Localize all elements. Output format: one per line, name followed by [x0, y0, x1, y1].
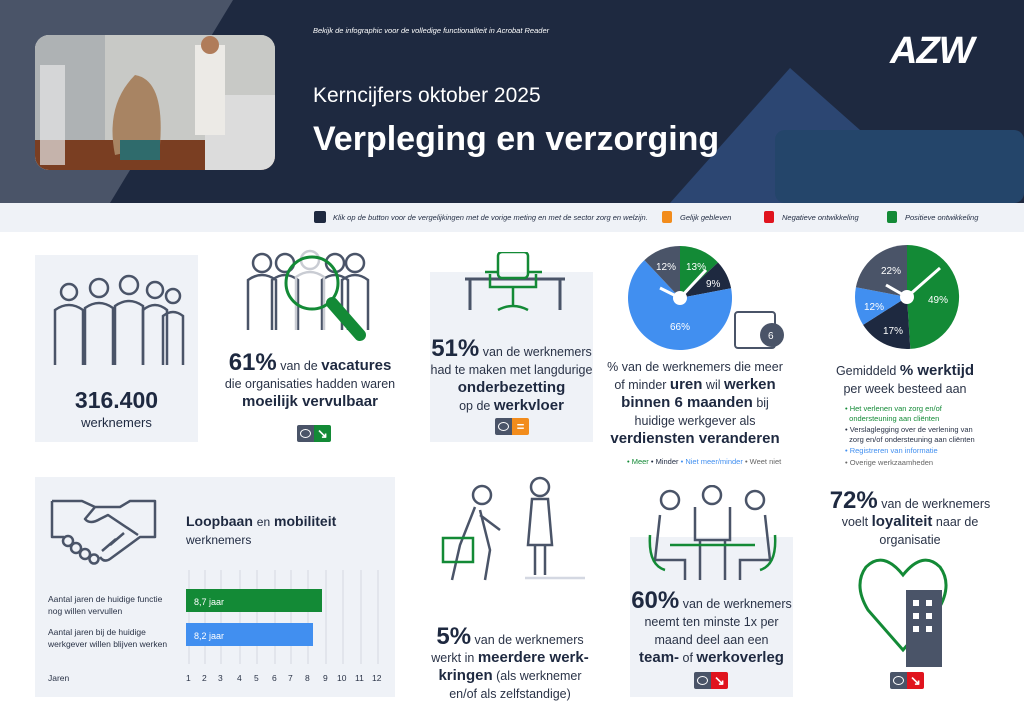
- bar chart: 11: [355, 673, 364, 683]
- bar chart: 8,2 jaar: [194, 631, 224, 641]
- legend bar: [0, 203, 1024, 232]
- bar chart: 8: [305, 673, 310, 683]
- panel: werkoverleg: [630, 537, 793, 697]
- text: 72%: voelt loyaliteit naar de: [842, 513, 978, 530]
- button 72: [890, 672, 924, 689]
- chart: pie uren: 6: [768, 331, 774, 342]
- legend werktijd: • Overige werkzaamheden: [845, 458, 933, 466]
- photo: [35, 35, 275, 170]
- text: uren: of minder uren wil werken: [614, 376, 776, 393]
- text: 51%: op de werkvloer: [459, 397, 564, 414]
- legend werktijd: • Het verlenen van zorg en/of: [845, 404, 942, 413]
- panel: werknemers: [35, 255, 198, 442]
- text: 61%: 61% van de vacatures: [229, 349, 391, 376]
- icon: handshake: [50, 500, 156, 565]
- button 61: ↘: [317, 426, 328, 441]
- chart: pie werktijd: 49%: [928, 295, 948, 306]
- icon: calendar: [735, 312, 775, 348]
- button 51: =: [517, 419, 524, 434]
- icon: meeting: [648, 485, 776, 580]
- button 60: ↘: [714, 673, 725, 688]
- chart: pie uren: 9%: [706, 279, 721, 290]
- icon: desk chair: [465, 252, 565, 312]
- chart: pie uren: 13%: [686, 262, 706, 273]
- text: 5%: [431, 623, 589, 701]
- legend bar: Klik op de button voor de vergelijkingen met de vorige meting en met de sector zorg en welzijn.: [333, 213, 648, 222]
- button 61: [297, 425, 331, 442]
- bar chart: 10: [337, 673, 347, 683]
- legend werktijd: • Verslaglegging over de verlening van: [845, 425, 973, 434]
- bar chart: 3: [218, 673, 223, 683]
- text: 51%: 51% van de werknemers: [431, 335, 592, 362]
- text: 72%: [830, 487, 990, 547]
- chart: pie werktijd: 17%: [883, 326, 903, 337]
- bar chart: Aantal jaren bij de huidige: [48, 627, 146, 637]
- button 51: [495, 418, 529, 435]
- text: werktijd: per week besteed aan: [843, 382, 966, 396]
- text: 72%: organisatie: [879, 533, 941, 547]
- chart: pie uren: 12%: [656, 262, 676, 273]
- text: 61%: moeilijk vervulbaar: [242, 393, 378, 410]
- button 72: ↘: [910, 673, 921, 688]
- panel: werknemers: werknemers: [81, 415, 152, 430]
- text: 60%: team- of werkoverleg: [639, 649, 784, 666]
- panel: loopbaan: werknemers: [186, 533, 251, 547]
- text: 61%: die organisaties hadden waren: [225, 377, 395, 391]
- panel: loopbaan: [35, 477, 395, 697]
- text: 5%: werkt in meerdere werk-: [431, 649, 589, 666]
- subtitle: Kerncijfers oktober 2025: [313, 84, 541, 107]
- chart: pie werktijd: [855, 245, 960, 349]
- icon: walking people: [442, 476, 585, 580]
- bar chart: nog willen vervullen: [48, 606, 122, 616]
- text: uren: huidige werkgever als: [635, 414, 755, 428]
- bar chart: 6: [272, 673, 277, 683]
- bar chart: Aantal jaren de huidige functie: [48, 594, 163, 604]
- bar chart: 5: [254, 673, 259, 683]
- bar chart: 2: [202, 673, 207, 683]
- bar chart: 4: [237, 673, 242, 683]
- text: 5%: en/of als zelfstandige): [449, 687, 571, 701]
- text: 51%: [431, 335, 592, 414]
- chart: pie uren: [628, 246, 784, 350]
- bar chart: werkgever willen blijven werken: [47, 639, 167, 649]
- legend werktijd: ondersteuning aan cliënten: [849, 414, 939, 422]
- text: uren: verdiensten veranderen: [610, 430, 780, 447]
- text: 60%: 60% van de werknemers: [631, 587, 792, 614]
- text: 72%: 72% van de werknemers: [830, 487, 990, 514]
- text: 5%: 5% van de werknemers: [436, 623, 584, 650]
- bar chart: 1: [186, 673, 191, 683]
- bar chart: 7: [288, 673, 293, 683]
- header background: [0, 0, 1024, 203]
- text: uren: binnen 6 maanden bij: [621, 394, 769, 411]
- legend werktijd: [845, 404, 975, 466]
- number: 316.400: [75, 387, 158, 413]
- logo AZW: AZW: [890, 30, 974, 72]
- header note: Bekijk de infographic voor de volledige functionaliteit in Acrobat Reader: [313, 26, 549, 35]
- text: werktijd: [836, 362, 974, 396]
- text: uren: [607, 360, 783, 447]
- legend werktijd: • Registreren van informatie: [845, 446, 938, 455]
- icon: heart building: [858, 558, 948, 667]
- legend werktijd: zorg en/of ondersteuning aan cliënten: [849, 434, 975, 444]
- title: Verpleging en verzorging: [313, 120, 719, 158]
- text: 5%: kringen (als werknemer: [438, 667, 582, 684]
- text: 60%: maand deel aan een: [654, 633, 768, 647]
- chart: pie uren: 66%: [670, 322, 690, 333]
- chart: pie werktijd: 12%: [864, 302, 884, 313]
- panel: onderbezetting: [430, 272, 593, 442]
- icon: people: [54, 274, 184, 365]
- text: 51%: had te maken met langdurige: [431, 363, 592, 377]
- chart: pie werktijd: 22%: [881, 266, 901, 277]
- bar chart: 8,7 jaar: [194, 597, 224, 607]
- text: 61%: [225, 349, 395, 410]
- legend bar: Negatieve ontwikkeling: [782, 213, 859, 222]
- text: werktijd: Gemiddeld % werktijd: [836, 362, 974, 379]
- icon: vacatures magnifier: [246, 250, 370, 341]
- legend bar: Positieve ontwikkeling: [905, 213, 978, 222]
- text: 60%: [631, 587, 792, 666]
- text: 51%: onderbezetting: [458, 379, 565, 396]
- bar chart: [47, 570, 382, 683]
- button 60: [694, 672, 728, 689]
- heading loopbaan: Loopbaan en mobiliteit: [186, 513, 336, 529]
- bar chart: Jaren: [48, 673, 70, 683]
- legend bar: Gelijk gebleven: [680, 213, 731, 222]
- text: uren: % van de werknemers die meer: [607, 360, 783, 374]
- legend uren: • Meer • Minder • Niet meer/minder • Weet niet: [627, 457, 781, 466]
- text: 60%: neemt ten minste 1x per: [644, 615, 779, 629]
- bar chart: 9: [323, 673, 328, 683]
- bar chart: 12: [372, 673, 382, 683]
